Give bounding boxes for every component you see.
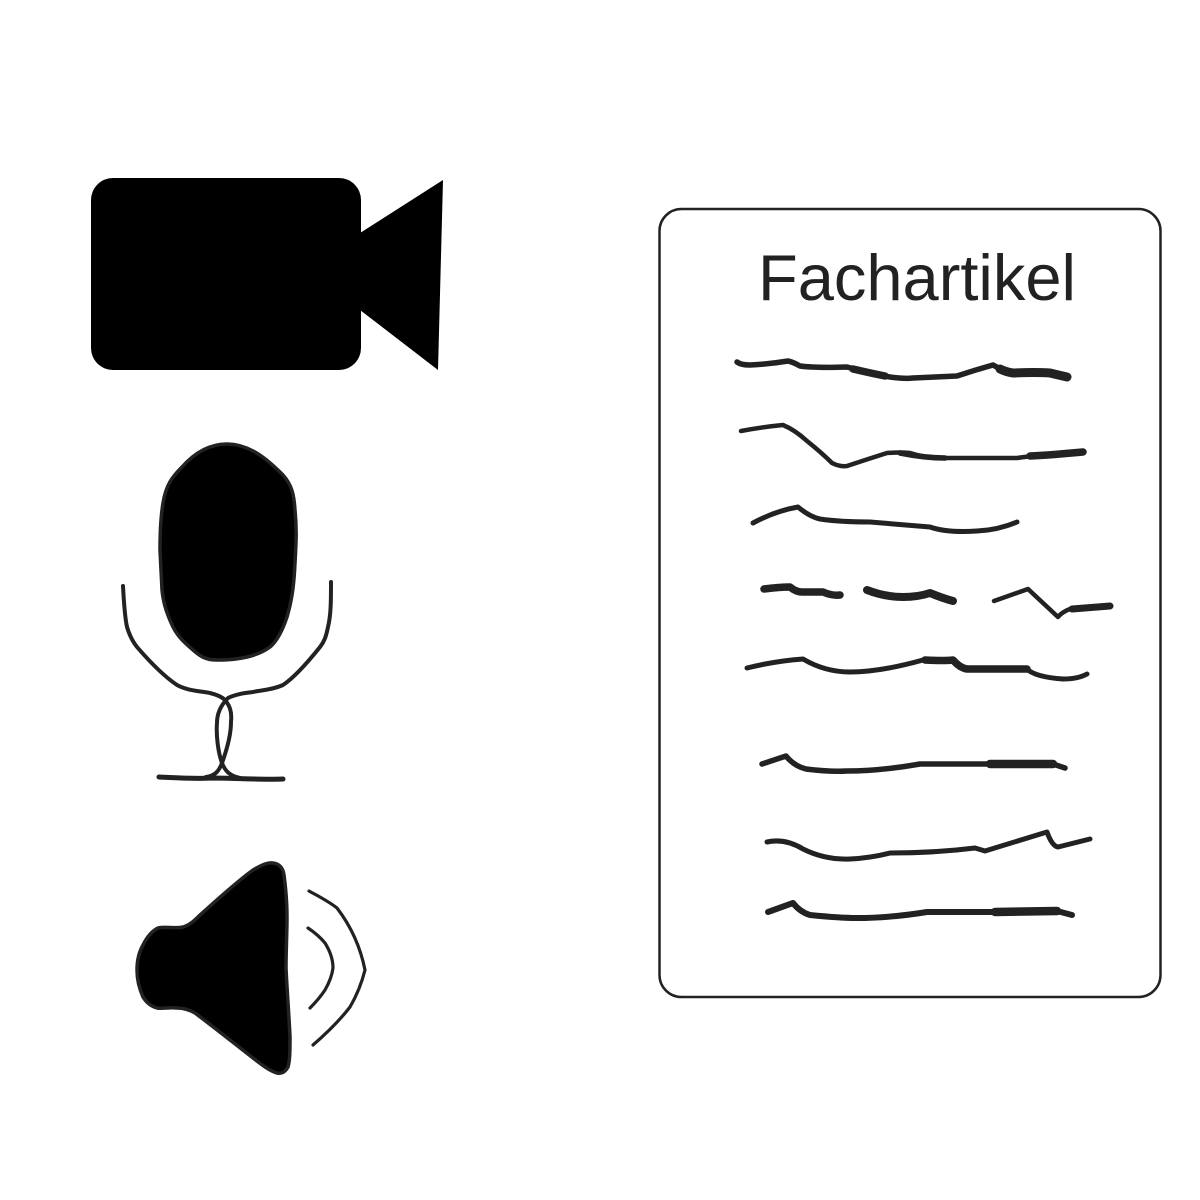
scribble line 7 [767, 832, 1090, 859]
scribbled text lines [737, 361, 1110, 918]
scribble line 5 [747, 659, 1087, 679]
scribble line 8 [768, 903, 1072, 918]
scribble line 4 word 2 [867, 590, 953, 601]
heading: Fachartikel: Fachartikel [758, 241, 1076, 314]
scribble line 1 [737, 361, 1067, 378]
scribble line 6 [762, 756, 1065, 771]
scribble line 4 word 1 [764, 587, 840, 595]
scribble line 4 word 3 [994, 589, 1110, 617]
icon: video camera [91, 178, 443, 370]
panel: Fachartikel document [660, 209, 1160, 997]
icon: speaker [137, 863, 365, 1073]
scribble line 2 [741, 425, 1083, 466]
icon: microphone [123, 444, 331, 779]
scribble line 3 [753, 507, 1017, 532]
